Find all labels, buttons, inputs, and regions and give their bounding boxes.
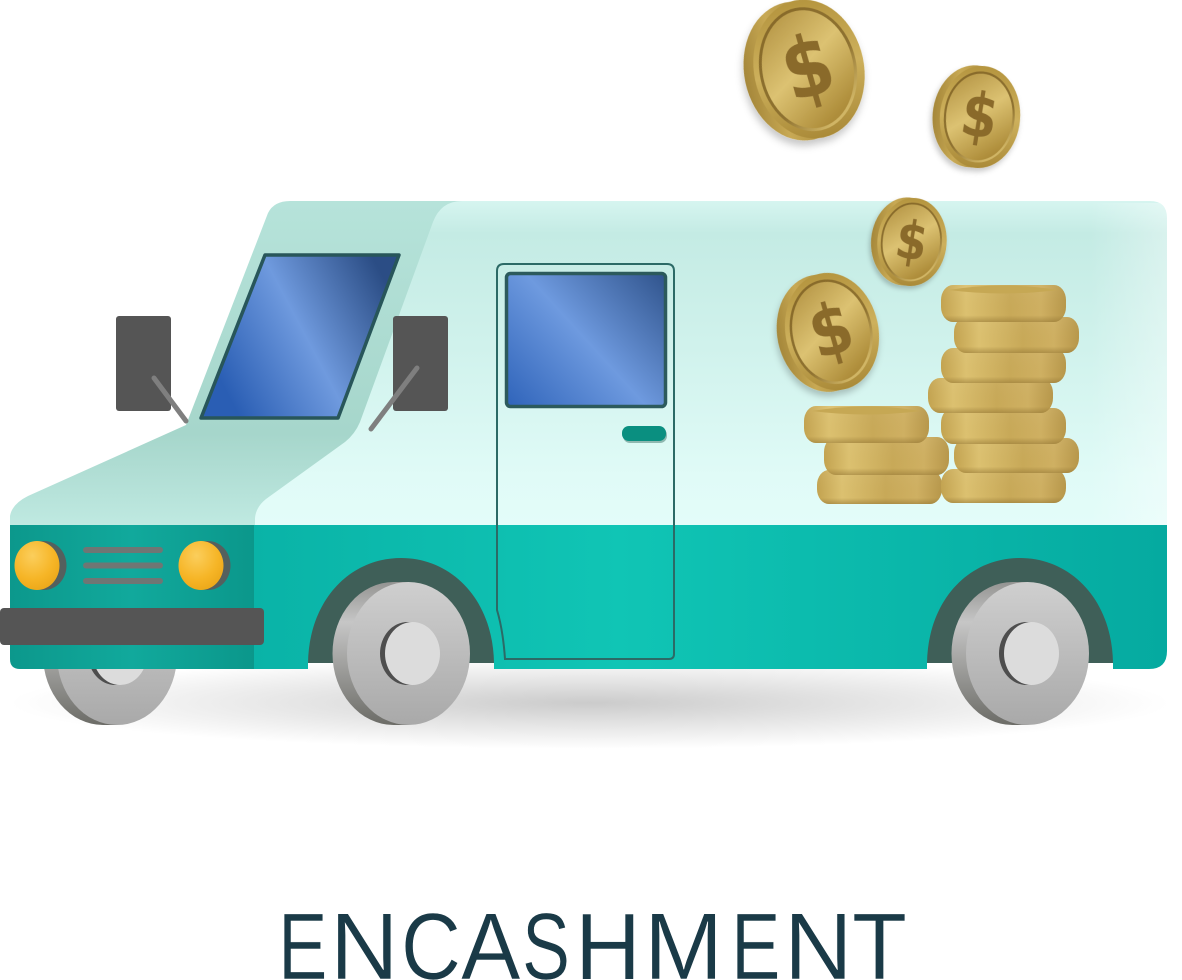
coin stack right	[928, 285, 1079, 503]
grille	[83, 547, 163, 584]
back wheel arch and wheel	[927, 558, 1113, 725]
coin middle: $	[891, 207, 932, 274]
coin top right: $	[956, 78, 1003, 154]
windshield	[201, 255, 399, 418]
van front grille panel	[10, 525, 254, 669]
front wheel	[43, 585, 177, 725]
middle wheel arch and wheel	[308, 558, 494, 725]
coin middle	[867, 194, 950, 289]
van cab upper body	[10, 201, 470, 525]
coin lower: $	[799, 285, 863, 376]
van lower body	[254, 525, 1167, 669]
van cargo upper body	[255, 201, 1167, 525]
headlight right	[178, 541, 230, 590]
coin top right	[928, 62, 1024, 171]
left mirror	[116, 316, 186, 421]
ground shadow	[10, 657, 1170, 749]
coin stack left	[804, 406, 949, 504]
bumper	[0, 608, 264, 645]
headlight left	[14, 541, 66, 590]
door window	[506, 274, 666, 406]
coin large top	[731, 0, 877, 151]
coin lower	[766, 264, 890, 401]
cargo right edge glow	[1090, 203, 1167, 525]
coin large top: $	[771, 15, 845, 122]
door handle	[622, 426, 667, 443]
door	[497, 264, 674, 659]
right mirror	[371, 316, 448, 429]
